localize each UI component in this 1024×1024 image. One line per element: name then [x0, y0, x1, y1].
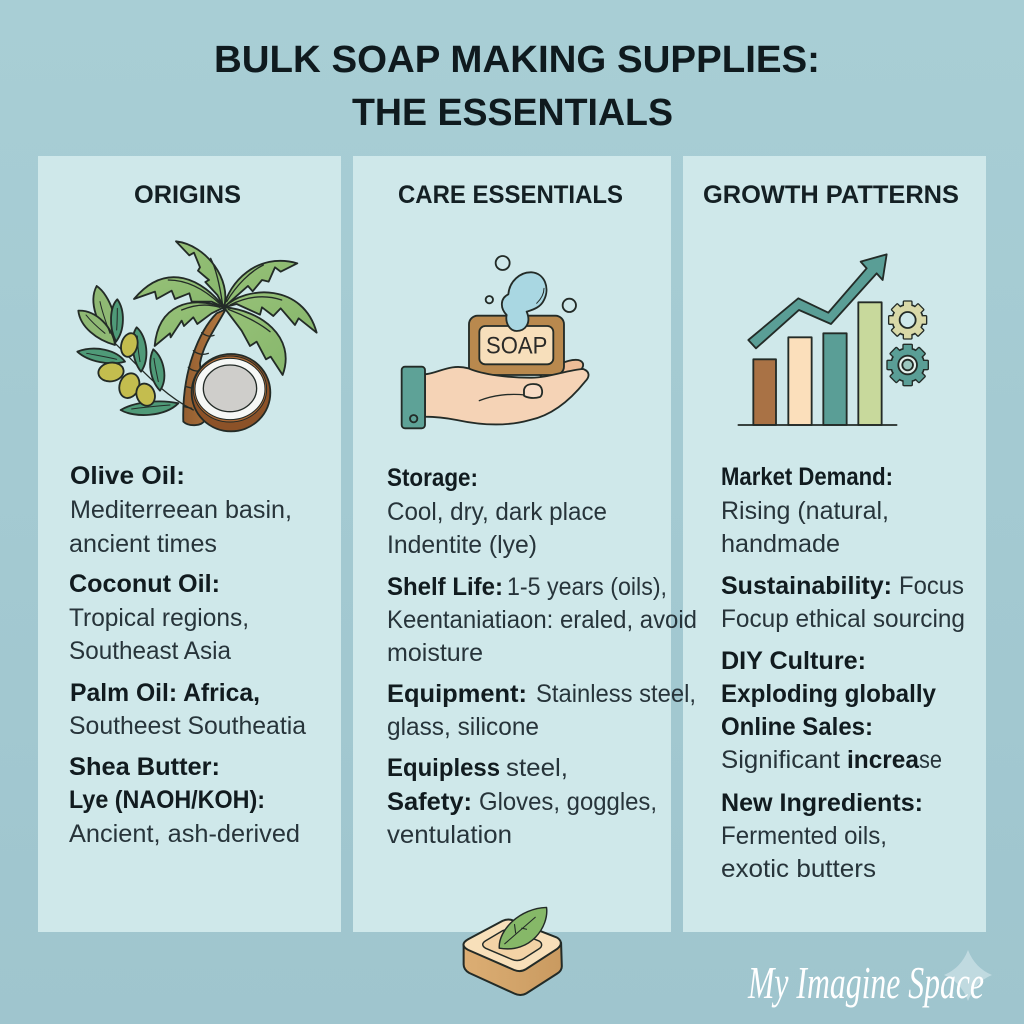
- foam: [502, 272, 546, 331]
- panel: origins: [38, 156, 341, 932]
- title: [214, 39, 820, 134]
- text: growth list: Online Sales:: [721, 713, 873, 741]
- icon: teal gear: [887, 344, 928, 386]
- text: care list: Gloves, goggles,: [479, 788, 657, 816]
- text: care list: moisture: [387, 639, 483, 667]
- text: growth list: handmade: [721, 530, 840, 558]
- text: origins list: Lye (NAOH/KOH):: [69, 786, 265, 814]
- text: origins list: Tropical regions,: [69, 604, 249, 632]
- text: growth list: Exploding globally: [721, 680, 936, 708]
- text: origins list: Ancient, ash-derived: [69, 820, 300, 848]
- title: THE ESSENTIALS: [352, 92, 673, 134]
- heading: care essentials: CARE ESSENTIALS: [398, 181, 623, 209]
- text: origins list: Southeast Asia: [69, 637, 231, 665]
- heading: growth patterns: GROWTH PATTERNS: [703, 181, 959, 209]
- text: care list: Storage:: [387, 464, 478, 492]
- heading: origins: ORIGINS: [134, 181, 241, 209]
- text: origins list: ancient times: [69, 530, 217, 558]
- text: origins list: Palm Oil: Africa,: [70, 679, 260, 707]
- text: care list: Stainless steel,: [536, 680, 696, 708]
- icon: soap bar with leaf: [463, 907, 562, 995]
- text: care list: Equipless: [387, 754, 500, 782]
- text: care list: Cool, dry, dark place: [387, 498, 607, 526]
- text: growth list: DIY Culture:: [721, 647, 866, 675]
- text: origins list: Shea Butter:: [69, 753, 220, 781]
- text: care list: Safety:: [387, 788, 472, 816]
- text: care list: Shelf Life:: [387, 573, 503, 601]
- text: growth list: New Ingredients:: [721, 789, 923, 817]
- text: care list: steel,: [506, 754, 568, 782]
- text: growth list: [721, 463, 965, 883]
- text: growth list: Fermented oils,: [721, 822, 887, 850]
- text: growth list: Focus: [899, 572, 964, 600]
- text: origins list: Mediterreean basin,: [70, 496, 292, 524]
- text: origins list: Southeest Southeatia: [69, 712, 306, 740]
- icon: palm tree, olive branch and coconut: [77, 241, 317, 431]
- text: care list: [387, 464, 697, 849]
- text: growth list: exotic butters: [721, 855, 876, 883]
- text: care list: Equipment:: [387, 680, 527, 708]
- text: growth list: Sustainability:: [721, 572, 892, 600]
- panel: care essentials: [353, 156, 697, 932]
- text: growth list: increa: [847, 746, 920, 774]
- panel: growth patterns: [683, 156, 986, 932]
- text: care list: ventulation: [387, 821, 512, 849]
- text: origins list: Olive Oil:: [70, 462, 185, 490]
- text: growth list: se: [919, 746, 942, 774]
- title: BULK SOAP MAKING SUPPLIES:: [214, 39, 820, 81]
- text: care list: Keentaniatiaon: eraled, avoid: [387, 606, 697, 634]
- label: soap: SOAP: [486, 332, 547, 359]
- text: origins list: Coconut Oil:: [69, 570, 220, 598]
- text: growth list: Rising (natural,: [721, 497, 889, 525]
- text: care list: Indentite (lye): [387, 531, 537, 559]
- icon: rising bar chart with gears: [738, 254, 928, 425]
- icon: light gear: [889, 301, 927, 339]
- text: growth list: Significant: [721, 746, 840, 774]
- text: growth list: Market Demand:: [721, 463, 893, 491]
- text: origins list: [69, 462, 306, 848]
- text: growth list: Focup ethical sourcing: [721, 605, 965, 633]
- text: care list: glass, silicone: [387, 713, 539, 741]
- icon: hand holding soap: [402, 256, 589, 428]
- text: care list: 1-5 years (oils),: [507, 573, 667, 601]
- watermark star: [944, 950, 992, 1001]
